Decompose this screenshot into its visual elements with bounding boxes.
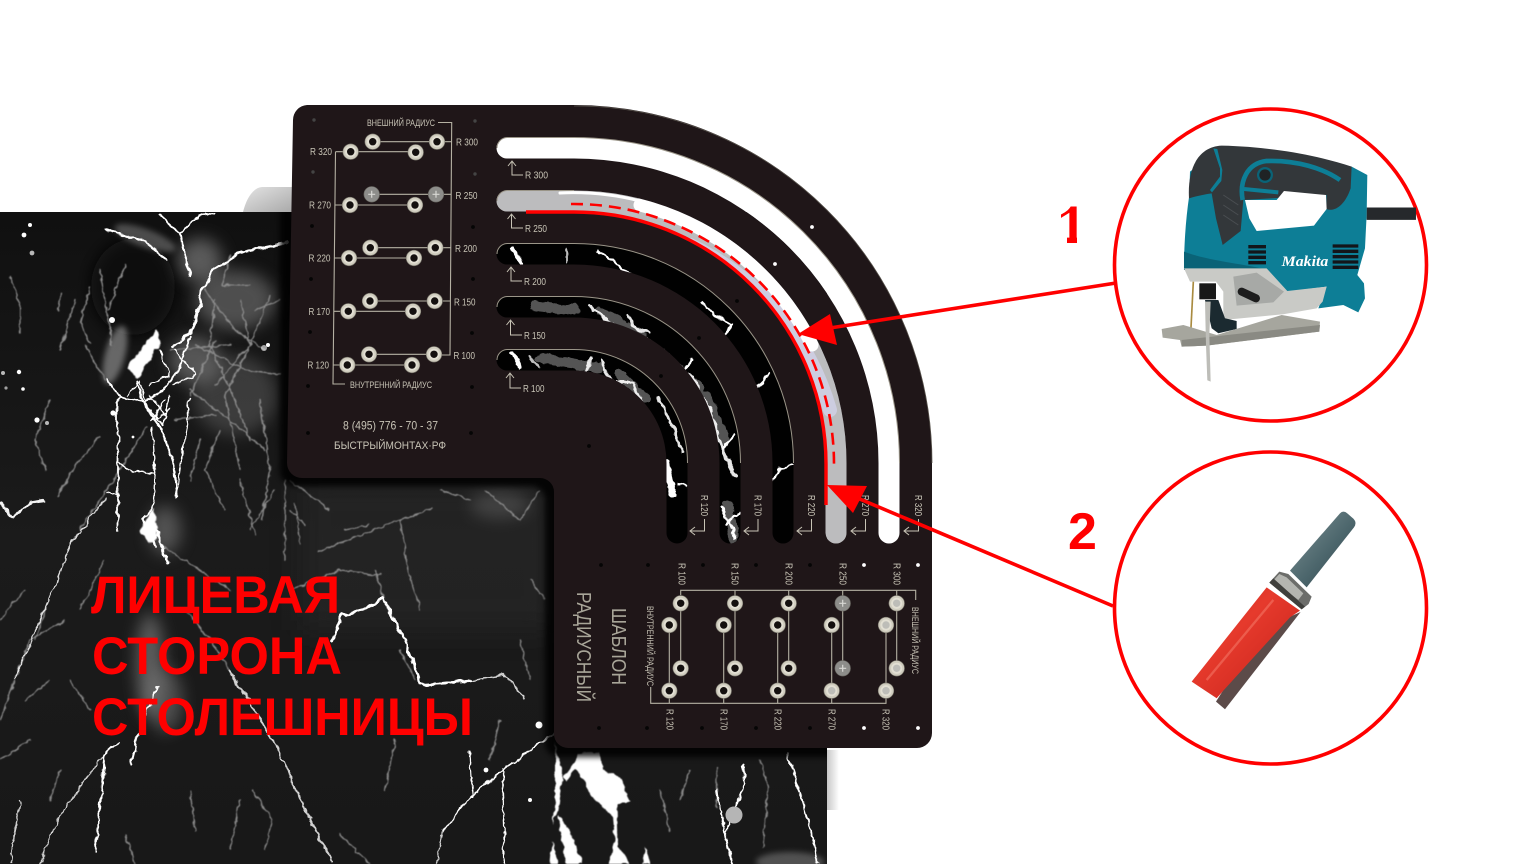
main white veins: [0, 213, 818, 864]
icon: jigsaw: [1162, 146, 1416, 382]
upper panel labels: R 170: [308, 307, 330, 318]
lower panel labels: [572, 563, 921, 730]
grey cut slot R250: [507, 193, 836, 533]
upper panel labels: R 250: [456, 191, 478, 202]
number 1: 1: [1057, 196, 1086, 255]
white marble blotches: [127, 330, 651, 864]
circle callout: router bit: [1114, 452, 1426, 764]
slot end labels with arrows: R 220: [805, 495, 816, 516]
upper panel labels: ВНЕШНИЙ РАДИУС: [367, 117, 435, 129]
upper panel labels: БЫСТРЫЙМОНТАХ·РФ: [334, 439, 446, 452]
upper panel labels: R 320: [310, 147, 332, 158]
lower panel labels: R 300: [890, 563, 901, 585]
slot start labels with arrows: R 200: [524, 277, 546, 288]
icon: router bit: [1192, 512, 1355, 709]
upper panel labels: 8 (495) 776 - 70 - 37: [343, 418, 438, 432]
slot start labels with arrows: R 300: [525, 170, 548, 182]
heading: face side of countertop: [91, 566, 473, 747]
marble veins seen through slots: [512, 248, 792, 538]
slot start labels with arrows: R 150: [524, 331, 546, 342]
slot start labels with arrows: R 250: [525, 224, 547, 235]
template shadow on marble: [275, 212, 827, 762]
slot edge highlights: [497, 106, 932, 463]
slot start labels with arrows: R 100: [523, 384, 545, 395]
heading: face side of countertop: СТОРОНА: [92, 627, 342, 686]
marble specks: [1, 223, 542, 802]
upper panel labels: R 220: [308, 254, 331, 264]
lower panel labels: R 270: [826, 709, 837, 730]
white slot R300: [507, 148, 889, 533]
mounting holes: [306, 118, 920, 730]
slot end labels with arrows: R 120: [698, 495, 709, 516]
circle callout: jigsaw: [1114, 109, 1426, 421]
slot end labels with arrows: [690, 495, 923, 535]
upper panel labels: R 270: [309, 200, 331, 212]
upper panel labels: R 150: [454, 298, 476, 308]
arrow 2: [827, 485, 1113, 606]
slot end labels with arrows: R 320: [912, 495, 923, 516]
lower panel labels: ВНУТРЕННИЙ РАДИУС: [645, 606, 656, 686]
heading: face side of countertop: СТОЛЕШНИЦЫ: [92, 688, 473, 747]
lower panel labels: R 220: [772, 709, 783, 730]
upper panel labels: R 120: [308, 360, 329, 372]
slot end labels with arrows: R 170: [751, 495, 762, 516]
upper panel labels: [308, 117, 478, 452]
number 2: 2: [1068, 503, 1097, 561]
lower panel labels: R 100: [675, 563, 686, 585]
lower panel labels: R 250: [836, 563, 847, 585]
lower panel labels: R 320: [880, 709, 891, 730]
lower panel labels: R 170: [718, 709, 729, 730]
support edge right of marble: [827, 750, 839, 810]
icon: jigsaw: Makita: [1281, 254, 1328, 270]
lower panel labels: ВНЕШНИЙ РАДИУС: [910, 607, 921, 674]
red dashed line: jigsaw path: [571, 204, 834, 464]
upper panel labels: R 100: [454, 351, 475, 362]
lower panel labels: R 200: [782, 563, 793, 585]
lower panel: screw groups and brackets: [651, 590, 916, 703]
red cut line: router path: [526, 212, 826, 505]
upper panel labels: ВНУТРЕННИЙ РАДИУС: [350, 379, 432, 391]
slot end labels with arrows: R 270: [859, 495, 870, 516]
marble smudges: [98, 219, 824, 864]
upper panel labels: R 300: [456, 138, 478, 148]
marble countertop: [0, 212, 827, 864]
lower panel labels: РАДИУСНЫЙ: [572, 592, 596, 702]
grey support block behind template: [243, 187, 295, 212]
thin grey veining: [0, 255, 768, 864]
lower panel labels: R 150: [729, 563, 740, 585]
heading: face side of countertop: ЛИЦЕВАЯ: [91, 566, 340, 625]
lower panel labels: ШАБЛОН: [607, 608, 629, 685]
slot start labels with arrows: [506, 161, 548, 395]
lower panel labels: R 120: [664, 709, 675, 730]
arrow 1: [798, 283, 1116, 345]
radius template plate: [287, 105, 932, 748]
upper panel labels: R 200: [455, 244, 477, 255]
upper panel: screw groups and brackets: [333, 122, 452, 384]
